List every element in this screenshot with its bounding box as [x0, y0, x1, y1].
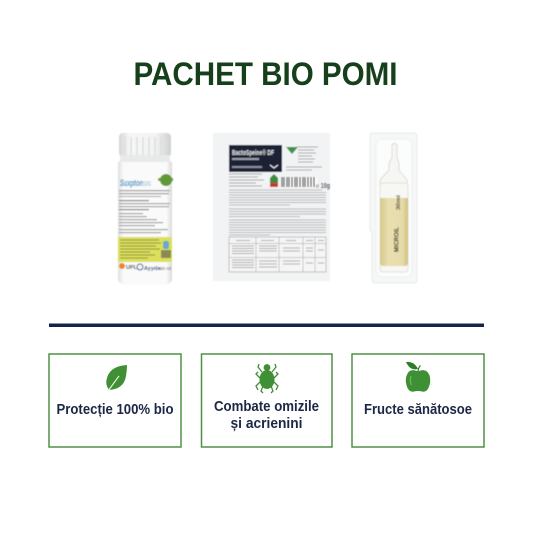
ampoule glass body	[380, 183, 408, 272]
sachet organic mark	[270, 174, 278, 187]
sachet company logo and address	[286, 147, 322, 170]
icon: leaf	[106, 365, 127, 391]
sachet dark header	[229, 145, 282, 172]
bottle body	[118, 160, 172, 285]
bottle label text lines	[119, 190, 170, 233]
bottle green badge	[158, 174, 173, 186]
bottle cap	[119, 133, 171, 162]
ampoule blister tray	[370, 133, 417, 283]
product: Suxpton bottle	[118, 133, 173, 285]
bottle brand logo: Suxpton	[120, 178, 143, 189]
bottle partner logos: 60 ml	[160, 266, 171, 271]
sachet dark header: BactoSpeine® DF	[232, 149, 275, 157]
product: Microil ampoule	[370, 133, 417, 283]
title: PACHET BIO POMI	[134, 56, 398, 92]
benefit text: Fructe sănătosoe	[364, 401, 472, 418]
ampoule glass neck	[380, 144, 407, 186]
ampoule oil fill	[380, 198, 408, 266]
sachet body text	[229, 190, 326, 235]
product: BactoSpeine DF sachet	[213, 133, 330, 281]
bottle brand logo: 10G	[143, 181, 151, 188]
ampoule volume print: 30ml	[396, 194, 402, 210]
benefit text: și acrienini	[230, 415, 302, 432]
benefit text	[214, 398, 319, 432]
bottle partner logos	[119, 263, 171, 272]
bottle partner logos: UPL	[126, 265, 138, 271]
panel: healthy fruit	[352, 354, 484, 447]
benefit text: Combate omizile	[214, 398, 319, 415]
panel: organic protection	[49, 354, 181, 447]
sachet net weight: ℮ 10g	[316, 183, 330, 190]
benefit text: Protecție 100% bio	[56, 401, 174, 418]
sachet pouch	[213, 133, 330, 281]
icon: bug	[256, 364, 278, 393]
bottle partner logos: Ayyda	[144, 266, 161, 272]
sachet table	[229, 237, 326, 272]
ampoule blister recess	[376, 139, 412, 277]
divider	[49, 324, 484, 327]
bottle yellow band	[118, 237, 172, 262]
sachet small text	[229, 174, 264, 186]
icon: apple	[406, 362, 430, 392]
panel: fights caterpillars and mites	[202, 354, 332, 447]
ampoule brand print: MICROIL	[394, 227, 400, 252]
sachet barcode	[281, 177, 317, 187]
